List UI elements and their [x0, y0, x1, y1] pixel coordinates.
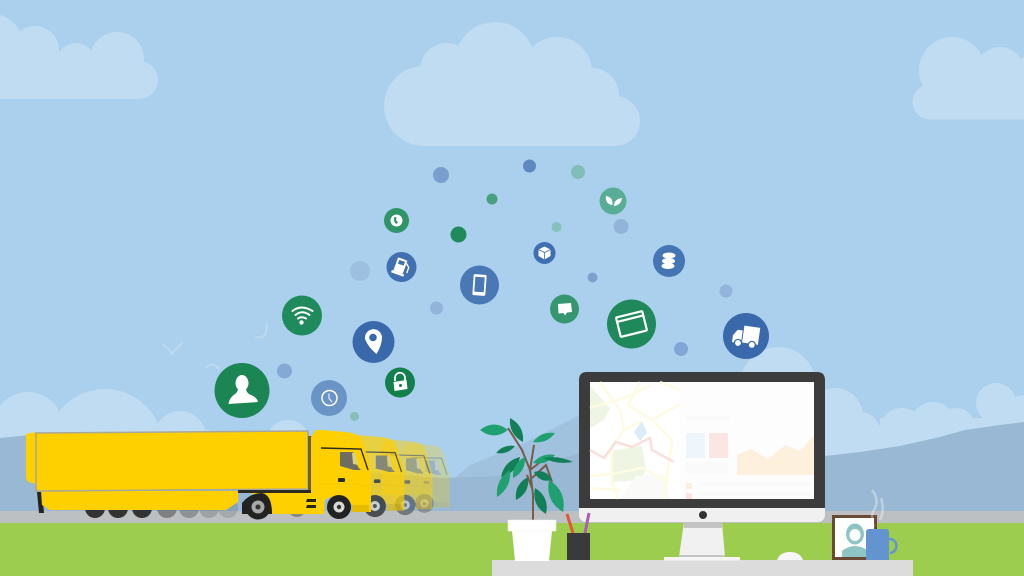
monitor stand	[664, 522, 740, 560]
cloud: top right	[912, 37, 1024, 123]
red tile	[709, 433, 728, 458]
chassis	[238, 491, 325, 514]
tractor rear wheel	[242, 493, 272, 520]
plant leaves	[480, 418, 573, 514]
dashboard panel	[680, 382, 814, 499]
faded following trucks	[349, 435, 449, 517]
trailer front section	[26, 432, 36, 484]
dashboard map	[590, 382, 680, 499]
horizon clouds: right	[740, 347, 1024, 475]
tractor gap	[308, 436, 312, 492]
icon: fuel pump	[386, 252, 416, 282]
mountain range	[0, 422, 1024, 511]
trailer rear bumper	[37, 492, 44, 513]
screen	[590, 382, 814, 499]
icon: leaf	[600, 188, 626, 214]
pen holder	[567, 513, 590, 560]
icon: person	[214, 363, 270, 418]
distant hill	[440, 415, 580, 511]
icon: chat bubble	[550, 294, 579, 324]
coffee mug with steam	[866, 490, 897, 560]
cloud: top left	[0, 14, 158, 99]
icon: location pin	[352, 321, 394, 363]
trailer wheels	[85, 498, 306, 518]
icon: globe	[384, 208, 409, 233]
potted plant	[480, 418, 573, 561]
chassis vents	[306, 499, 316, 508]
road	[0, 511, 1024, 523]
connected data bubbles	[214, 160, 769, 421]
icon: padlock	[385, 368, 415, 398]
computer mouse	[777, 552, 803, 560]
monitor	[579, 372, 825, 560]
plant pot	[512, 531, 552, 561]
plant stem	[508, 428, 552, 520]
camera dot	[699, 511, 707, 519]
birds	[163, 324, 267, 369]
icon: database	[653, 245, 685, 277]
icon: parcel box	[534, 242, 556, 264]
icon: smartphone	[460, 266, 499, 304]
icon: clock	[311, 380, 347, 416]
monitor chin	[579, 505, 825, 522]
icon: browser window	[607, 300, 656, 348]
grass	[0, 523, 1024, 576]
horizon clouds: left	[0, 389, 310, 505]
desk	[492, 560, 913, 576]
icon: delivery truck	[723, 313, 769, 359]
truck fleet	[26, 430, 449, 520]
trailer box	[36, 431, 308, 491]
cloud: top centre	[384, 22, 640, 146]
area chart	[737, 435, 814, 475]
main cab	[311, 430, 371, 519]
icon: wifi	[282, 296, 322, 336]
photo frame	[834, 516, 876, 558]
monitor bezel	[579, 372, 825, 508]
dots	[277, 160, 732, 421]
trailer skirt	[41, 491, 238, 510]
blue tile	[686, 433, 705, 458]
